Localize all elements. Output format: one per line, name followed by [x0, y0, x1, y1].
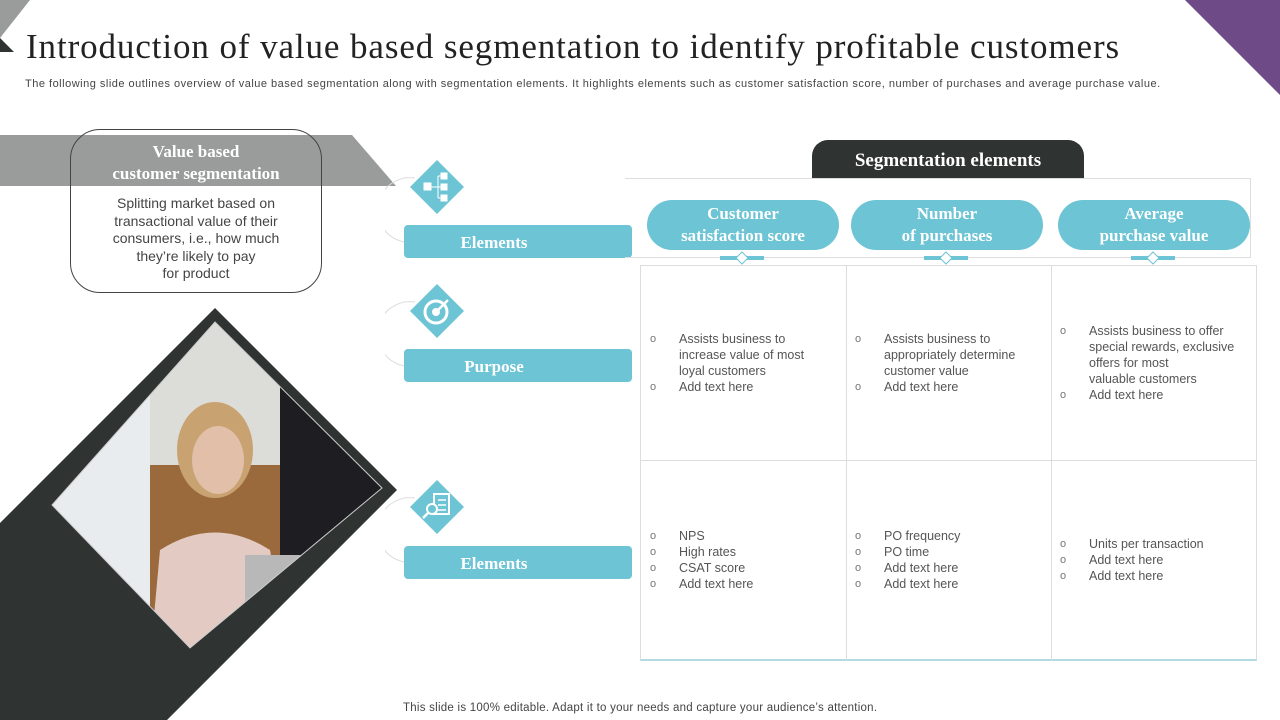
cell: purpose customer satisfaction: Assists business to	[679, 332, 785, 346]
heading: customer segmentation	[112, 164, 280, 183]
cell: purpose number of purchases: appropriately determine	[884, 348, 1015, 362]
cell: elements customer satisfaction: NPS	[679, 529, 705, 543]
cell: purpose average purchase value: valuable customers	[1089, 372, 1197, 386]
photo frame	[0, 308, 397, 720]
icon: target diamond	[410, 284, 464, 338]
description: they’re likely to pay	[136, 248, 256, 264]
cell: elements average purchase value: Add text here	[1089, 553, 1163, 567]
cell: elements number of purchases: Add text here	[884, 561, 958, 575]
icon: hierarchy diamond	[410, 160, 464, 214]
cell: purpose customer satisfaction: loyal customers	[679, 364, 766, 378]
description: for product	[163, 265, 229, 281]
cell: elements average purchase value: Units per transaction	[1089, 537, 1204, 551]
cell: elements average purchase value	[1060, 537, 1204, 583]
cell: elements number of purchases	[856, 529, 960, 591]
pill: customer satisfaction score: Customer	[707, 204, 779, 223]
connectors	[720, 251, 1175, 265]
title: Introduction of value based segmentation to identify profitable customers	[26, 27, 1120, 66]
cell: elements number of purchases: PO time	[884, 545, 929, 559]
description: Splitting market based on	[117, 195, 275, 211]
cell: purpose average purchase value	[1060, 324, 1234, 402]
cell: purpose number of purchases: customer value	[884, 364, 969, 378]
cell: elements customer satisfaction: CSAT score	[679, 561, 745, 575]
cell: purpose number of purchases: Add text here	[884, 380, 958, 394]
cell: elements customer satisfaction	[650, 529, 753, 591]
bar: elements 2: Elements	[460, 554, 528, 573]
panel: value based customer segmentation	[70, 129, 322, 293]
cell: elements number of purchases: Add text here	[884, 577, 958, 591]
header: segmentation elements: Segmentation elements	[855, 150, 1041, 171]
heading	[112, 142, 280, 183]
pill: number of purchases: of purchases	[902, 226, 992, 245]
decorative corner: top left	[0, 0, 30, 52]
footer note: This slide is 100% editable. Adapt it to your needs and capture your audience’s attention.	[403, 702, 877, 714]
cell: purpose customer satisfaction: Add text here	[679, 380, 753, 394]
cell: elements customer satisfaction: Add text here	[679, 577, 753, 591]
arcs connecting icons to bars	[385, 177, 415, 562]
description: transactional value of their	[114, 212, 278, 228]
cell: elements number of purchases: PO frequency	[884, 529, 960, 543]
pill: customer satisfaction score: satisfaction score	[681, 226, 805, 245]
header: segmentation elements	[812, 140, 1084, 179]
subtitle: The following slide outlines overview of value based segmentation along with segmentation elements. It highlights elements such as customer satisfaction score, number of purchases and average purchase value.	[25, 78, 1161, 90]
pill: average purchase value	[1058, 200, 1250, 250]
bar: elements 2	[404, 546, 632, 579]
decorative corner: top right purple	[1185, 0, 1280, 95]
heading: Value based	[153, 142, 239, 161]
pill: number of purchases	[851, 200, 1043, 250]
cell: purpose customer satisfaction: increase value of most	[679, 348, 804, 362]
table grid	[640, 265, 1257, 661]
cell: purpose average purchase value: offers for most	[1089, 356, 1169, 370]
cell: purpose average purchase value: Add text here	[1089, 388, 1163, 402]
pill: customer satisfaction score	[647, 200, 839, 250]
pill: average purchase value: purchase value	[1100, 226, 1208, 245]
cell: purpose number of purchases	[856, 332, 1015, 394]
pill: average purchase value: Average	[1124, 204, 1184, 223]
bar: purpose	[404, 349, 632, 382]
description: consumers, i.e., how much	[113, 230, 279, 246]
bar: purpose: Purpose	[464, 357, 524, 376]
header row box	[625, 178, 1251, 258]
cell: elements average purchase value: Add text here	[1089, 569, 1163, 583]
cell: purpose average purchase value: special rewards, exclusive	[1089, 340, 1234, 354]
cell: purpose number of purchases: Assists business to	[884, 332, 990, 346]
bar: elements: Elements	[460, 233, 528, 252]
cell: elements customer satisfaction: High rates	[679, 545, 736, 559]
cell: purpose average purchase value: Assists business to offer	[1089, 324, 1224, 338]
pill: number of purchases: Number	[917, 204, 977, 223]
description	[113, 195, 279, 281]
icon: document search diamond	[410, 480, 464, 534]
gray banner	[0, 135, 396, 186]
bar: elements	[404, 225, 632, 258]
cell: purpose customer satisfaction	[650, 332, 804, 394]
